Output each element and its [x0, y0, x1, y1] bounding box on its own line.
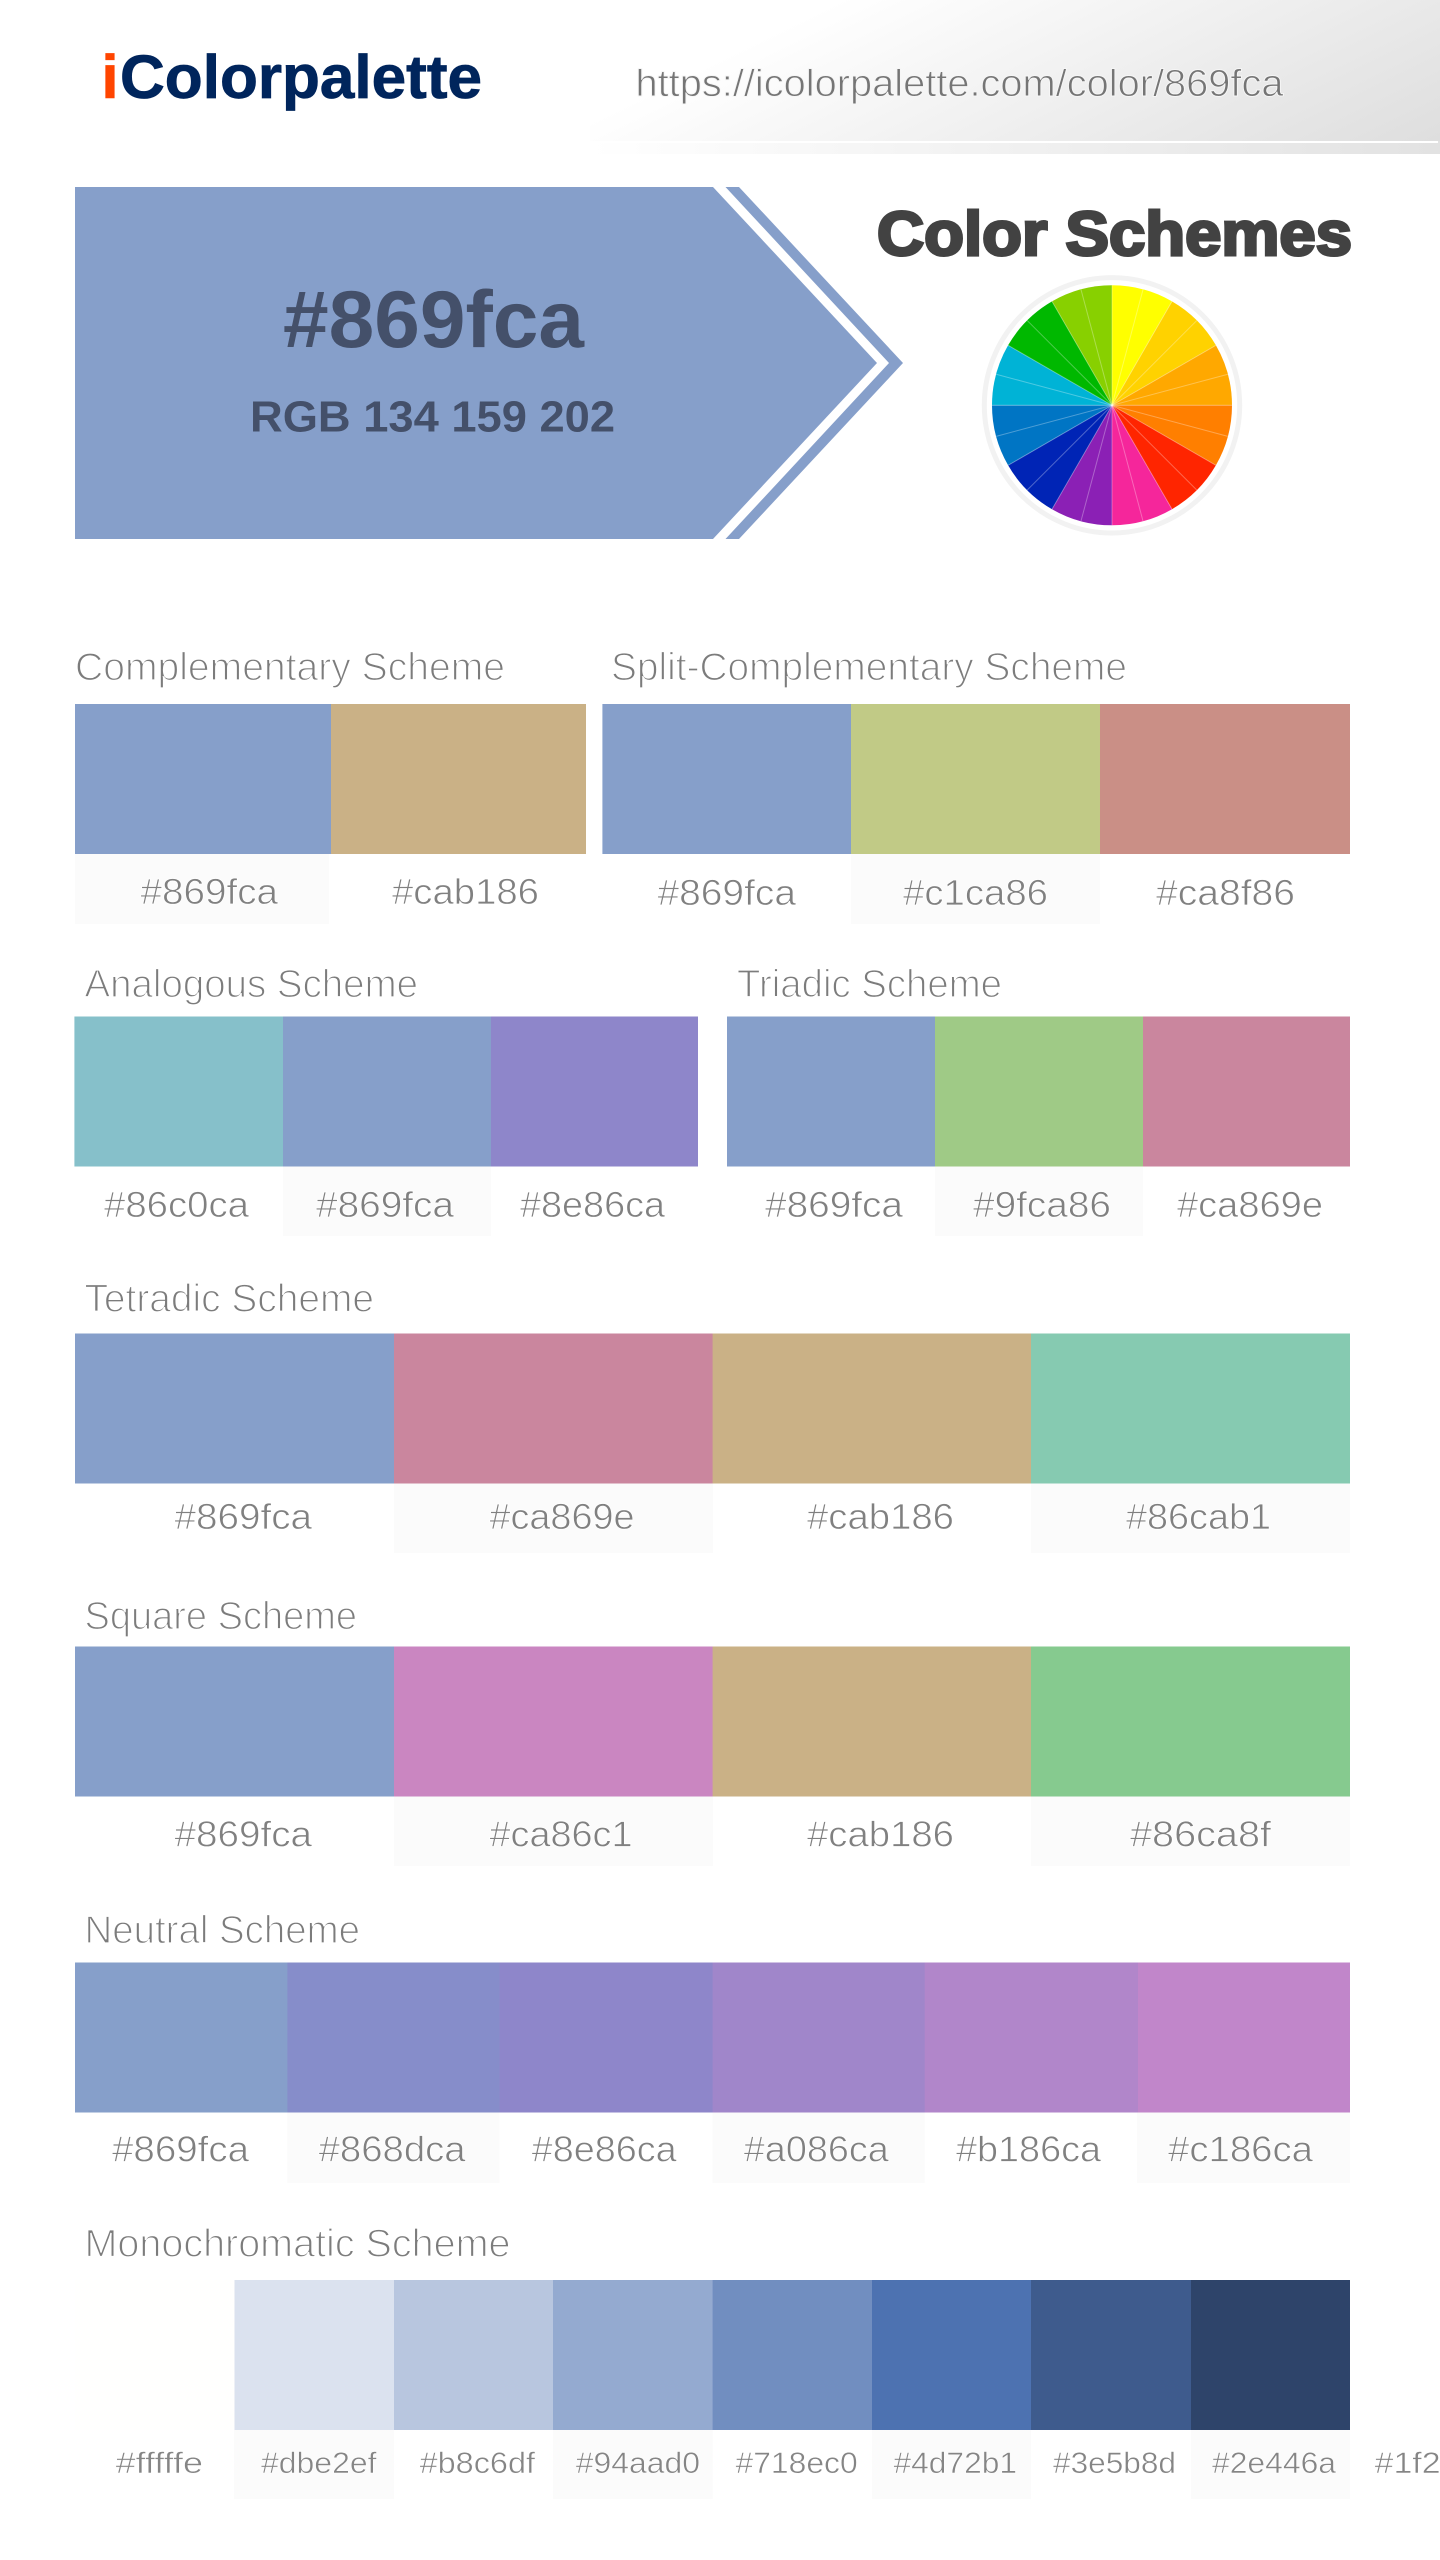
panel: analogous scheme: #86c0ca — [104, 1184, 250, 1225]
panel: monochromatic scheme: #4d72b1 — [894, 2447, 1017, 2480]
panel: monochromatic scheme: #1f2 — [1375, 2447, 1440, 2480]
icon: color wheel — [984, 278, 1240, 533]
panel: neutral scheme: #a086ca — [744, 2128, 890, 2170]
panel: square scheme: #86ca8f — [1130, 1814, 1272, 1854]
panel: analogous scheme: #869fca — [316, 1184, 455, 1225]
color arrow panel — [75, 187, 903, 539]
panel: split-complementary scheme: #ca8f86 — [1156, 872, 1295, 913]
panel: square scheme: #cab186 — [807, 1814, 954, 1854]
panel: analogous scheme — [74, 963, 698, 1236]
color schemes heading: Color Schemes — [877, 200, 1352, 269]
panel: triadic scheme: #869fca — [765, 1184, 904, 1225]
heading: triadic: Triadic Scheme — [737, 963, 1002, 1006]
heading: monochromatic: Monochromatic Scheme — [84, 2222, 510, 2266]
url: https://icolorpalette.com/color/869fca — [636, 63, 1284, 105]
panel: monochromatic scheme: #fffffe — [116, 2447, 203, 2480]
panel: neutral scheme: #b186ca — [956, 2128, 1102, 2170]
panel: monochromatic scheme: #dbe2ef — [261, 2447, 377, 2480]
panel: monochromatic scheme: #718ec0 — [736, 2447, 858, 2480]
heading: neutral: Neutral Scheme — [84, 1909, 360, 1952]
header banner — [590, 0, 1440, 154]
panel: split-complementary scheme — [602, 646, 1350, 924]
panel: tetradic scheme: #ca869e — [490, 1496, 634, 1537]
panel: neutral scheme: #869fca — [112, 2128, 250, 2170]
panel: neutral scheme: #868dca — [319, 2128, 467, 2170]
panel: split-complementary scheme: #869fca — [658, 872, 797, 913]
panel: monochromatic scheme: #b8c6df — [420, 2447, 536, 2480]
panel: tetradic scheme: #cab186 — [807, 1496, 954, 1537]
panel: analogous scheme: #8e86ca — [520, 1184, 666, 1225]
heading: tetradic: Tetradic Scheme — [84, 1278, 374, 1320]
panel: triadic scheme: #9fca86 — [973, 1184, 1111, 1225]
hex heading: #869fca — [283, 275, 585, 365]
panel: monochromatic scheme: #2e446a — [1212, 2447, 1336, 2480]
panel: tetradic scheme — [75, 1278, 1350, 1553]
rgb value: RGB 134 159 202 — [250, 392, 615, 442]
heading: square: Square Scheme — [84, 1595, 357, 1638]
panel: neutral scheme — [75, 1909, 1350, 2183]
panel: tetradic scheme: #86cab1 — [1126, 1496, 1271, 1537]
panel: complementary scheme: #cab186 — [392, 871, 539, 912]
heading: analogous: Analogous Scheme — [84, 963, 418, 1006]
heading: split-complementary: Split-Complementary Scheme — [611, 646, 1127, 689]
panel: monochromatic scheme — [75, 2222, 1440, 2499]
panel: monochromatic scheme: #3e5b8d — [1053, 2447, 1176, 2480]
panel: complementary scheme: #869fca — [140, 871, 279, 912]
panel: split-complementary scheme: #c1ca86 — [903, 872, 1048, 913]
panel: complementary scheme — [75, 646, 586, 924]
panel: square scheme — [75, 1595, 1350, 1866]
panel: monochromatic scheme: #94aad0 — [576, 2447, 700, 2480]
panel: triadic scheme — [727, 963, 1350, 1236]
panel: square scheme: #869fca — [174, 1814, 313, 1854]
panel: square scheme: #ca86c1 — [490, 1814, 632, 1854]
heading: complementary: Complementary Scheme — [75, 646, 505, 689]
panel: triadic scheme: #ca869e — [1177, 1184, 1323, 1225]
logo: i — [102, 43, 118, 111]
logo: Colorpalette — [120, 43, 482, 111]
panel: neutral scheme: #c186ca — [1168, 2128, 1314, 2170]
panel: neutral scheme: #8e86ca — [532, 2128, 678, 2170]
panel: tetradic scheme: #869fca — [174, 1496, 313, 1537]
